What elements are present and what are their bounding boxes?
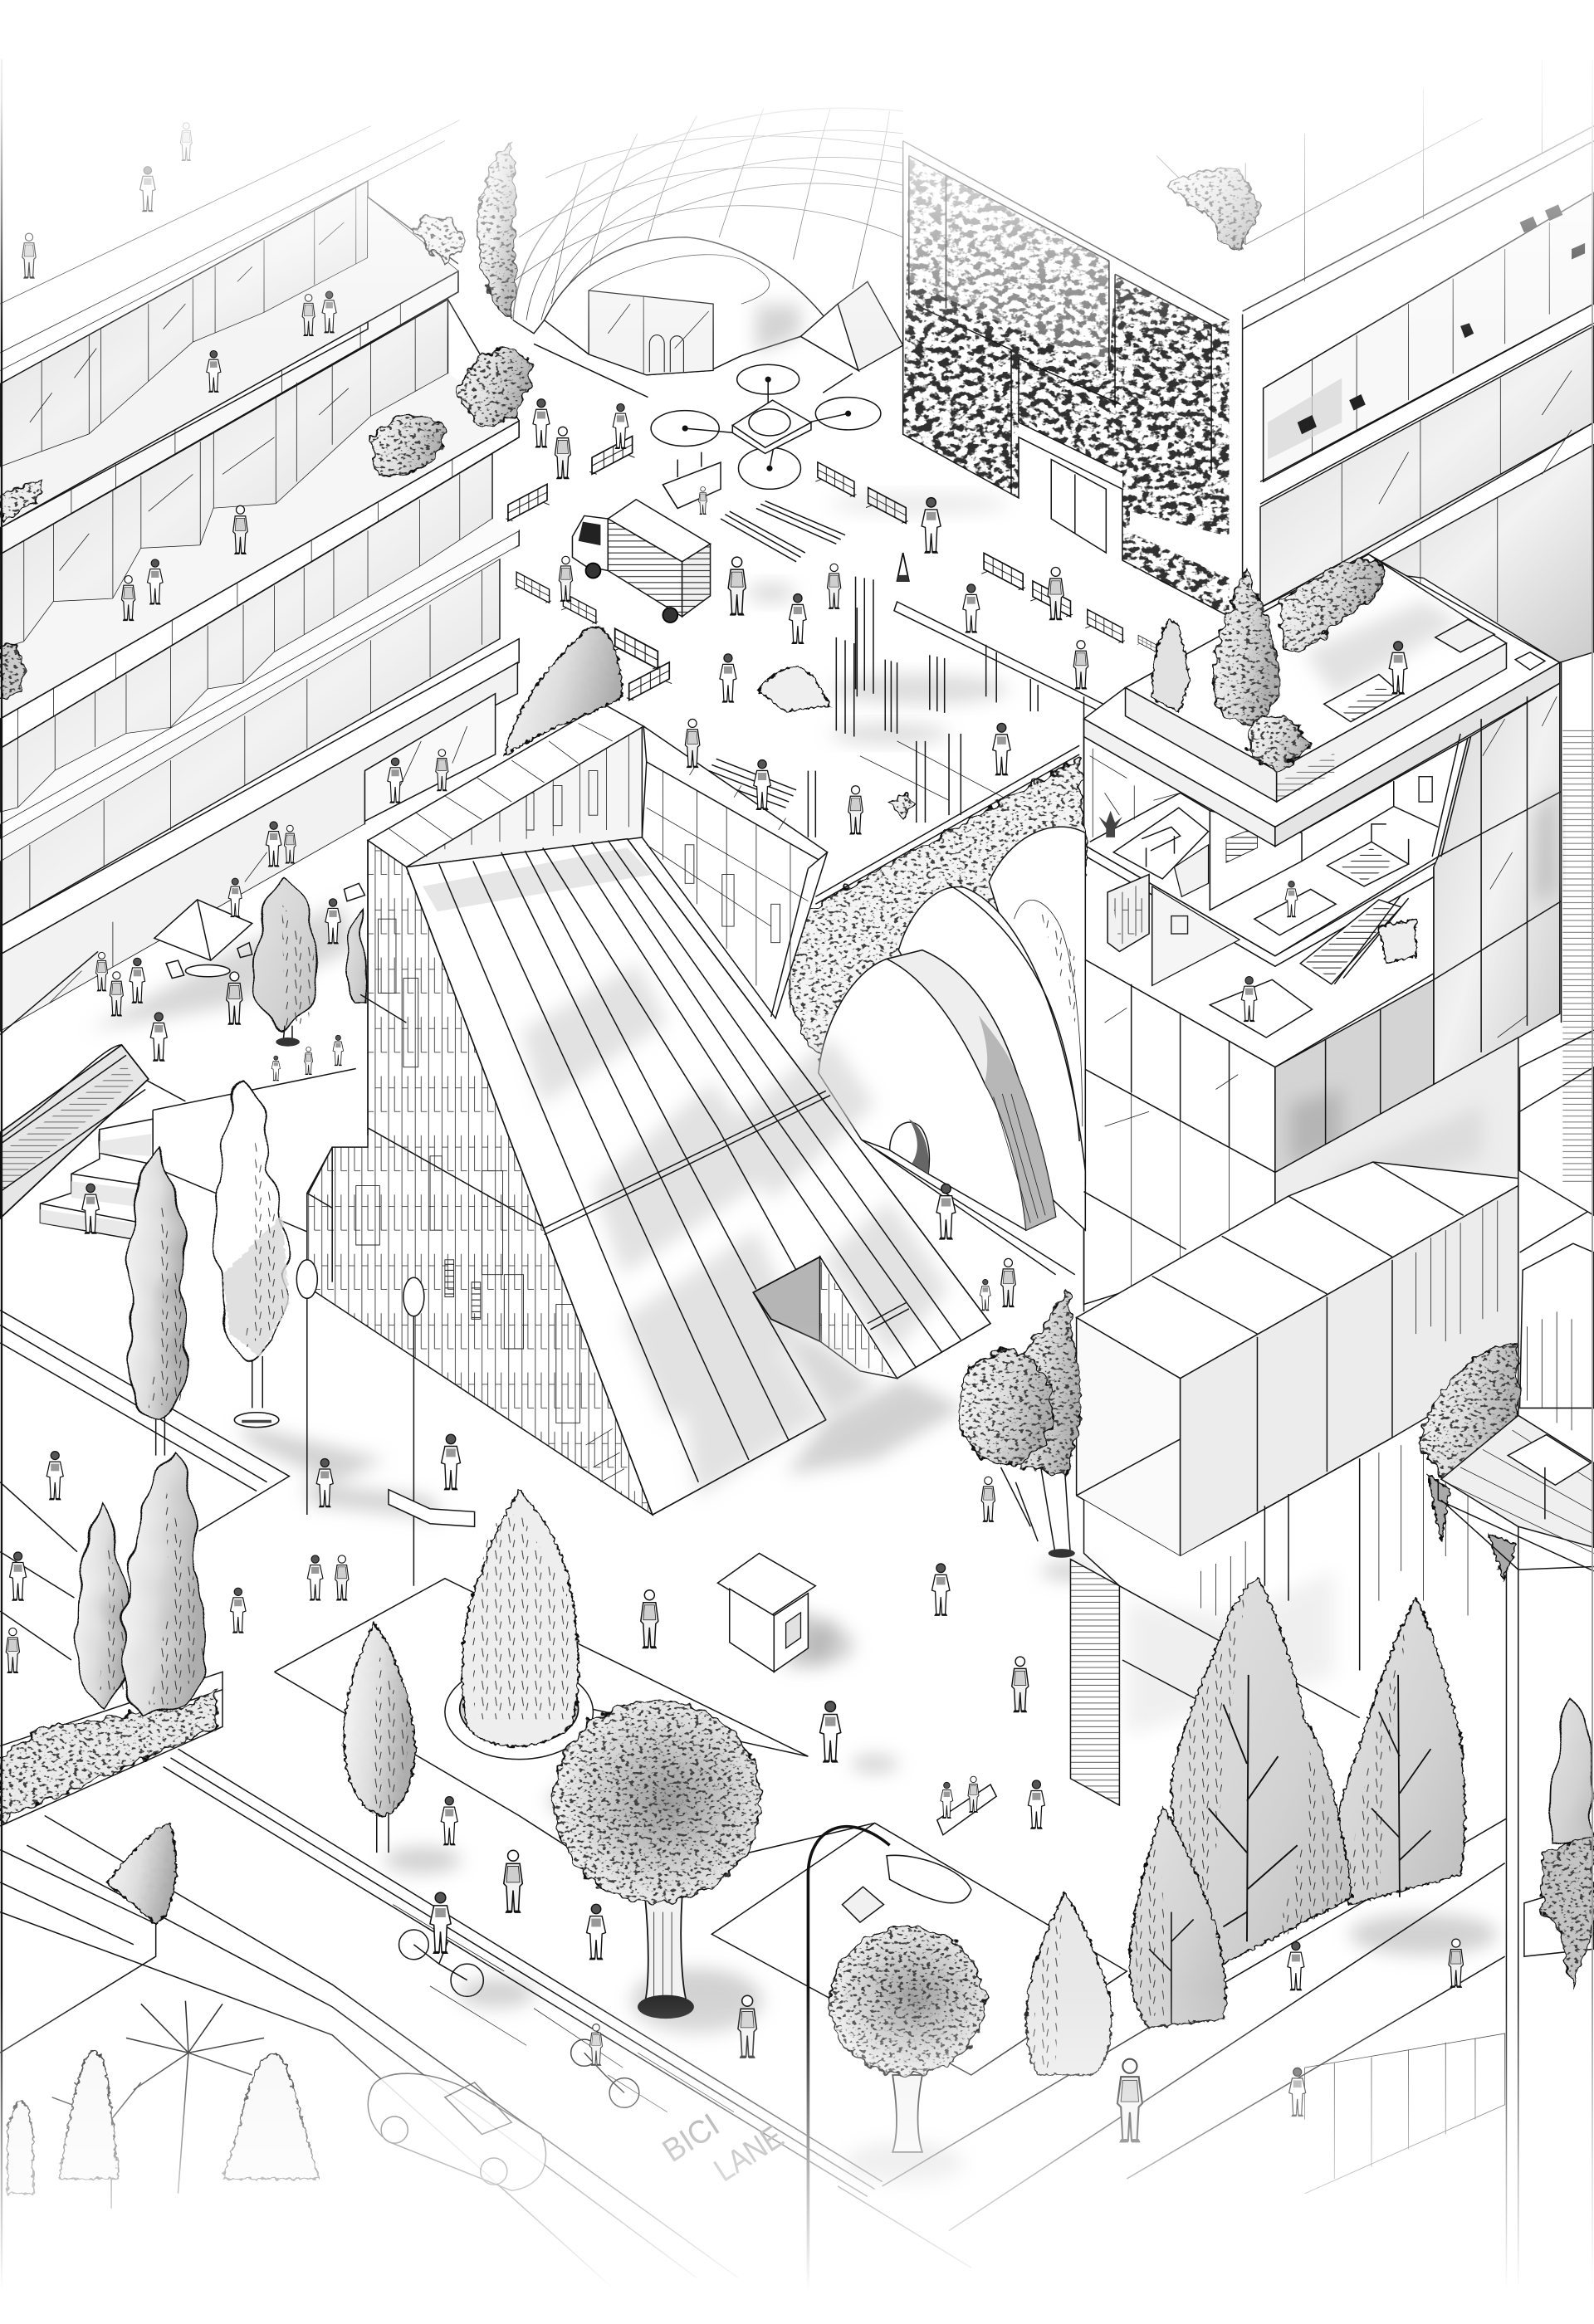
living area <box>1113 808 1209 879</box>
panel: office building, top right <box>1156 59 1594 662</box>
walkway beam <box>894 602 1106 715</box>
partition wall <box>1210 811 1302 910</box>
opening <box>753 1257 820 1341</box>
panel: bottom fade to white <box>0 1986 1594 2324</box>
tree: hedges on terraces <box>0 217 623 756</box>
steel columns <box>808 577 961 837</box>
panel: terraced glass building, top left <box>0 120 519 1134</box>
panel: construction site props <box>506 437 1157 837</box>
panel: ground shadows <box>237 1379 1498 2185</box>
panel: top fade to white <box>0 0 1594 341</box>
glass tower side <box>1434 683 1560 1086</box>
back wall <box>406 726 642 867</box>
truck <box>572 500 711 622</box>
icon: street lamps <box>296 1260 424 1586</box>
traffic cone <box>897 553 909 581</box>
panel: kiosk <box>717 1553 838 1672</box>
debris mound <box>758 667 830 711</box>
yoga mat and stair opening <box>1254 889 1336 935</box>
tree: small cypress in plaza <box>344 1623 415 1853</box>
left facade <box>307 840 653 1515</box>
tree: street trees near arches <box>958 1290 1083 1558</box>
panel: escalator <box>0 1045 149 1218</box>
lower wall under house <box>1084 1069 1275 1304</box>
lower faces <box>1084 959 1275 1172</box>
roof slope <box>406 839 990 1515</box>
text: bike lane marking: BICI <box>656 2107 726 2170</box>
panel: people <box>6 123 1463 2142</box>
timber stack <box>704 759 796 808</box>
slab edge <box>1084 719 1275 847</box>
panel: green living wall <box>897 141 1238 630</box>
icon: cyclists <box>399 1892 639 2107</box>
panel: three arches <box>819 827 1085 1275</box>
panel: foliage behind arches <box>785 745 1085 1082</box>
panel: dome <box>477 108 903 398</box>
tree: corner planter tree <box>107 1823 176 1924</box>
icon: benches <box>389 1490 996 1922</box>
panel: lower right box building <box>1070 1162 1518 1819</box>
text: bike lane marking: LANE <box>707 2118 790 2189</box>
panel: palm trees <box>7 2001 319 2209</box>
panel: shaded plaza with umbrella and tree <box>89 879 366 1232</box>
icon: spiral stairs <box>40 1119 153 1241</box>
pipe bundles <box>721 501 845 562</box>
panel: right edge buildings and terrace <box>1419 726 1594 2324</box>
rooftop trees <box>1152 619 1189 711</box>
panel: planter hedges, lower left <box>0 1690 217 1820</box>
barriers <box>506 484 550 521</box>
upper floor room <box>1084 737 1468 956</box>
roof slab and rim <box>1084 554 1560 827</box>
tree: large round tree <box>553 1700 760 2019</box>
crate <box>663 462 721 508</box>
cap <box>368 704 643 867</box>
panel: plaza paving lines <box>0 1311 1506 2324</box>
tree: cypress trees, plaza left <box>76 1076 289 1715</box>
icon: curved street lamp <box>808 1827 971 2324</box>
panel: sloped main building <box>307 704 990 1515</box>
lower floor room <box>1084 855 1438 1067</box>
tree: large cypress group, lower right <box>1026 1579 1465 2075</box>
panel: roof garden house <box>1084 554 1562 1311</box>
text: bike lane marking <box>656 2081 790 2207</box>
tree: fountain tree on round planter <box>445 1490 593 1760</box>
icon: drone <box>651 364 881 489</box>
right wing wall <box>642 762 828 1018</box>
tree: round tree, lower plaza <box>830 1926 985 2152</box>
icon: convertible car <box>368 2073 546 2190</box>
